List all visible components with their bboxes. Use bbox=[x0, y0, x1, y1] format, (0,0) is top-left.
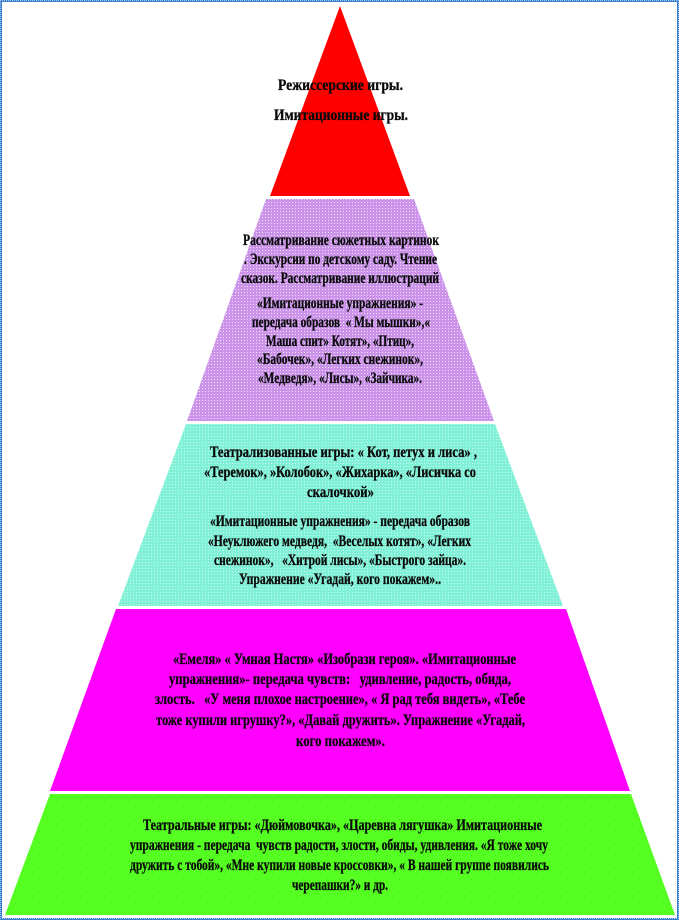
tier 1: red apex: Имитационные игры. bbox=[274, 107, 408, 124]
tier 2: purple: передача образов « Мы мышки»,« bbox=[252, 314, 430, 331]
tier 2: purple: «Медведя», «Лисы», «Зайчика». bbox=[258, 370, 422, 387]
tier 3: teal bbox=[118, 424, 563, 606]
tier 3: teal: Упражнение «Угадай, кого покажем».. bbox=[239, 571, 441, 588]
tier 2: purple bbox=[187, 199, 494, 421]
tier 4: magenta: кого покажем». bbox=[296, 733, 385, 750]
tier 2: purple: «Бабочек», «Легких снежинок», bbox=[257, 351, 423, 368]
tier 3: teal: снежинок», «Хитрой лисы», «Быстрого зайца». bbox=[214, 552, 466, 569]
tier 2: purple: Маша спит» Котят», «Птиц», bbox=[266, 333, 414, 350]
tier 3: teal: Театрализованные игры: « Кот, петух и лиса» , bbox=[210, 444, 477, 461]
tier 4: magenta: упражнения»- передача чувств: удивление, радость, обида, bbox=[169, 671, 511, 688]
tier 5: green base bbox=[5, 794, 675, 915]
tier 4: magenta: злость. «У меня плохое настроение», « Я рад тебя видеть», «Тебе bbox=[155, 691, 525, 708]
tier 3: teal: скалочкой» bbox=[307, 484, 374, 501]
tier 2: purple: Рассматривание сюжетных картинок bbox=[243, 232, 440, 249]
tier 5: green base: черепашки?» и др. bbox=[292, 877, 388, 894]
tier 3: teal: «Имитационные упражнения» - передача образов bbox=[210, 513, 470, 530]
tier 4: magenta bbox=[50, 609, 630, 791]
tier 3: teal: «Неуклюжего медведя, «Веселых котят», «Легких bbox=[208, 533, 471, 550]
tier 2: purple: . Экскурсии по детскому саду. Чтение bbox=[244, 251, 437, 268]
tier 2: purple: «Имитационные упражнения» - bbox=[257, 295, 423, 312]
tier 1: red apex: Режиссерские игры. bbox=[278, 77, 403, 94]
tier 1: red apex bbox=[270, 6, 410, 196]
tier 3: teal: «Теремок», »Колобок», «Жихарка», «Лисичка со bbox=[204, 464, 476, 481]
tier 4: magenta: тоже купили игрушку?», «Давай дружить». Упражнение «Угадай, bbox=[156, 712, 525, 729]
tier 5: green base: Театральные игры: «Дюймовочка», «Царевна лягушка» Имитационные bbox=[143, 817, 542, 834]
tier 2: purple: сказок. Рассматривание иллюстраций bbox=[241, 270, 439, 287]
tier 4: magenta: «Емеля» « Умная Настя» «Изобрази героя». «Имитационные bbox=[173, 651, 516, 668]
